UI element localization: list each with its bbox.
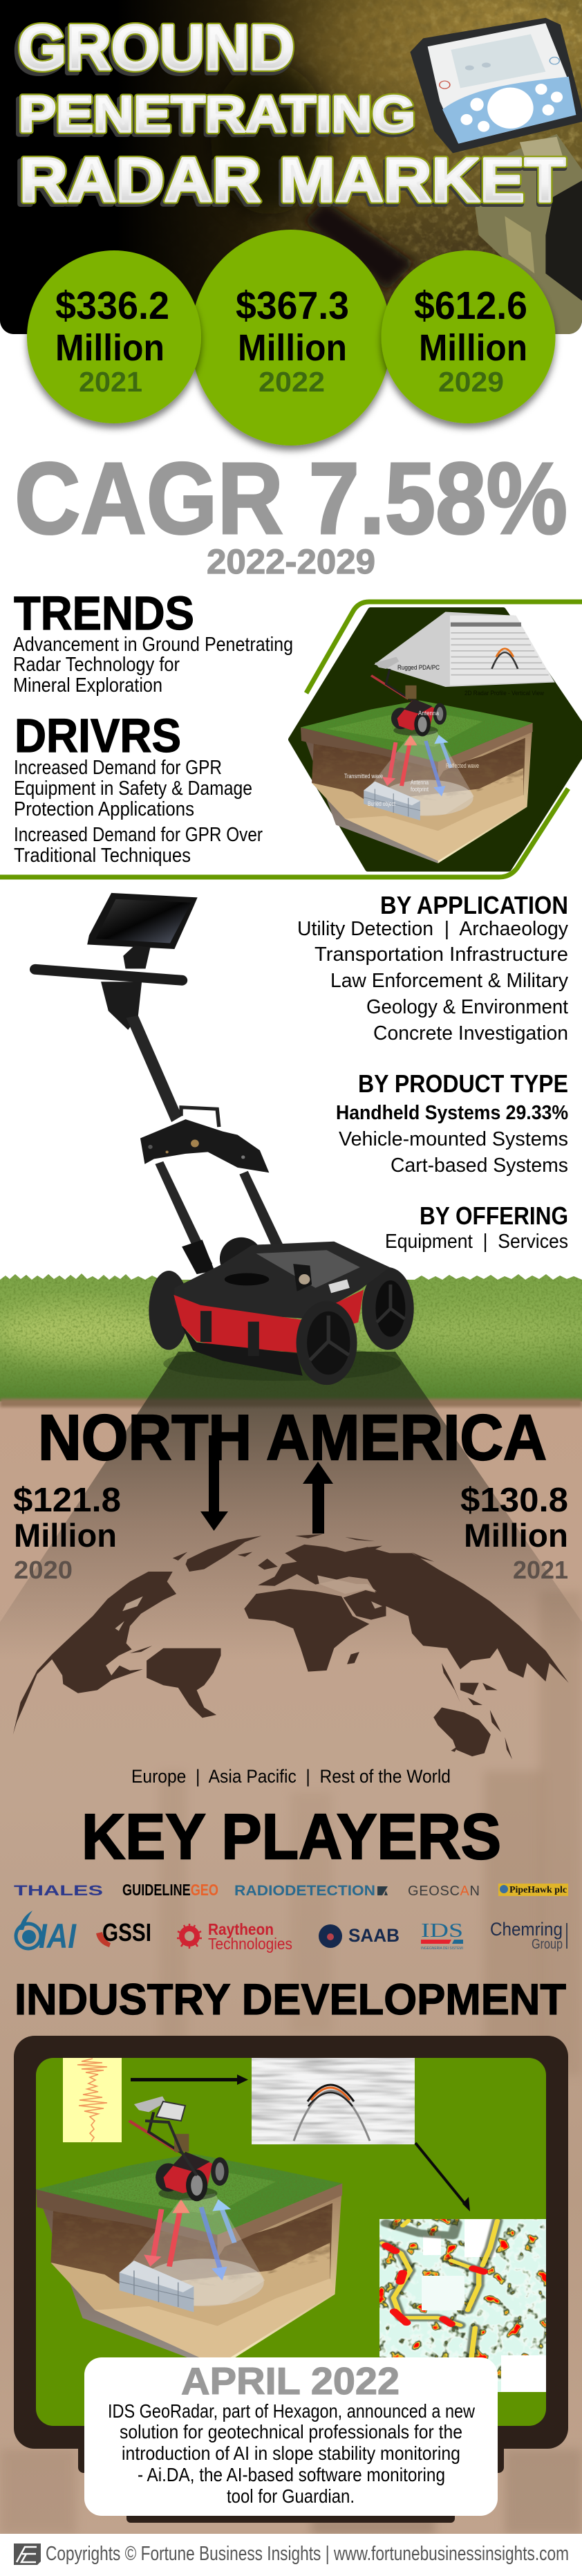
by offering block <box>385 1202 568 1253</box>
footer band <box>0 2534 582 2576</box>
monitor frame <box>14 2036 568 2449</box>
north america 2021 value: 2021 <box>513 1556 568 1584</box>
other regions list: Europe | Asia Pacific | Rest of the World <box>131 1766 451 1787</box>
CAGR period: 2022-2029 <box>207 542 375 581</box>
logo: Thales: THALES <box>14 1883 103 1899</box>
north america 2020 value <box>13 1482 121 1584</box>
title: PENETRATING <box>19 86 415 142</box>
card text: solution for geotechnical professionals for the <box>120 2421 462 2442</box>
logo: Raytheon Technologies: Raytheon <box>208 1920 274 1938</box>
drivers text block <box>14 709 263 867</box>
logo: Chemring Group <box>490 1919 567 1952</box>
logo: Chemring Group: Chemring <box>490 1919 563 1940</box>
cart tablet and handle <box>145 2101 197 2175</box>
title: GROUND <box>18 12 294 83</box>
by application block <box>297 891 568 1045</box>
by application block: Concrete Investigation <box>373 1022 568 1045</box>
by product type block: Vehicle-mounted Systems <box>339 1128 568 1150</box>
diagram labels: Reflected wave <box>446 762 479 770</box>
soil block illustration <box>34 2096 345 2368</box>
card text: IDS GeoRadar, part of Hexagon, announced a new <box>108 2400 476 2422</box>
logo: IDS: IDS <box>421 1920 463 1942</box>
market value circle: 2029 <box>382 250 556 423</box>
key players heading: KEY PLAYERS <box>82 1801 501 1873</box>
icon: detector console <box>410 18 582 153</box>
monitor stand <box>78 2398 504 2523</box>
logo: Geoscan: GEOSCAN <box>408 1884 480 1899</box>
by product type block: Handheld Systems 29.33% <box>336 1102 568 1124</box>
market value circle: 2021: Million <box>55 327 165 369</box>
arrow: up from map <box>303 1462 333 1534</box>
trends text block: Radar Technology for <box>13 654 180 676</box>
north america 2020 value: 2020 <box>14 1556 73 1584</box>
logo: IDS <box>421 1920 463 1951</box>
title: GROUND <box>15 16 294 86</box>
market value circle: 2022: $367.3 <box>236 284 349 328</box>
card text: - Ai.DA, the AI-based software monitoring <box>138 2464 445 2485</box>
diagram labels: Rugged PDA/PC <box>397 664 440 672</box>
drivers text block: Equipment in Safety & Damage <box>14 778 252 800</box>
logo: IAI <box>16 1911 77 1956</box>
drivers text block: Traditional Techniques <box>14 845 191 867</box>
diagram labels: footprint <box>411 786 429 793</box>
market value circle: 2029: 2029 <box>438 366 504 398</box>
market value circle: 2022 <box>191 230 391 445</box>
logo: Saab: SAAB <box>348 1925 400 1946</box>
title: PENETRATING <box>15 89 415 145</box>
trends text block: Advancement in Ground Penetrating <box>13 634 293 656</box>
panel: GPR diagram hexagon <box>291 610 582 869</box>
radargram image <box>252 2058 415 2144</box>
green frame lines <box>0 602 582 877</box>
north america 2021 value: $130.8 <box>460 1482 568 1519</box>
world map <box>13 1534 569 1759</box>
logo: PipeHawk <box>498 1884 568 1896</box>
soldier arm camo <box>475 134 582 334</box>
by application block: BY APPLICATION <box>380 891 568 919</box>
logo: Saab <box>319 1924 400 1948</box>
trends text block <box>13 587 293 697</box>
ground: grass strip <box>0 1273 582 1404</box>
logo: GSSI: GSSI <box>102 1918 151 1947</box>
title <box>15 12 565 218</box>
diagram labels: Antenna <box>418 710 440 717</box>
by offering block: Equipment | Services <box>385 1231 568 1253</box>
diagram labels <box>344 664 544 808</box>
title: RADAR MARKET <box>19 146 565 215</box>
arrow: radargram to heat map <box>415 2143 470 2211</box>
title: RADAR MARKET <box>16 149 565 218</box>
arrow: trace to radargram <box>131 2074 248 2085</box>
radar profile panel <box>374 612 555 687</box>
radar beam cone <box>0 1352 582 1674</box>
trends text block: Mineral Exploration <box>13 674 162 697</box>
white development card <box>84 2357 498 2516</box>
icon: Fortune Business Insights logo <box>14 2543 41 2565</box>
card text <box>108 2400 476 2507</box>
trends text block: TRENDS <box>14 587 194 640</box>
north america 2020 value: Million <box>14 1517 117 1554</box>
by application block: Utility Detection | Archaeology <box>297 918 568 940</box>
by application block: Law Enforcement & Military <box>330 970 568 992</box>
market value circle: 2021: $336.2 <box>55 284 169 328</box>
market value circle: 2029: Million <box>419 327 527 369</box>
diagram labels: 2D Radar Profile - Vertical View <box>464 690 544 697</box>
monitor screen <box>36 2058 546 2426</box>
card text: introduction of AI in slope stability monitoring <box>122 2442 460 2464</box>
drivers text block: Increased Demand for GPR <box>14 757 222 779</box>
logo: Raytheon Technologies: Technologies <box>208 1935 292 1953</box>
north america 2020 value: $121.8 <box>13 1482 121 1519</box>
logo: PipeHawk: PipeHawk plc <box>509 1885 567 1895</box>
market value circle: 2022: Million <box>238 327 347 369</box>
title: PENETRATING <box>19 86 415 142</box>
drivers text block: DRIVRS <box>15 709 181 762</box>
by product type block: Cart-based Systems <box>391 1154 568 1177</box>
soil block with radar cart <box>299 657 534 863</box>
logo: IDS: INGEGNERIA DEI SISTEMI <box>421 1947 463 1951</box>
market value circle: 2029: $612.6 <box>414 284 527 328</box>
seismic trace panel <box>63 2058 122 2142</box>
by application block: Transportation Infrastructure <box>315 944 568 966</box>
arrow: down to map <box>200 1435 228 1531</box>
industry development heading: INDUSTRY DEVELOPMENT <box>15 1976 566 2024</box>
logo: Guideline Geo: GUIDELINEGEO <box>122 1881 218 1899</box>
logo: Radiodetection: RADIODETECTION <box>234 1883 375 1899</box>
north america 2021 value: Million <box>464 1517 568 1554</box>
region heading: NORTH AMERICA <box>38 1401 547 1473</box>
by product type block <box>336 1069 568 1177</box>
logo: Chemring Group: Group <box>532 1937 563 1952</box>
card text: tool for Guardian. <box>227 2485 355 2507</box>
ground: soil background <box>0 1399 582 2534</box>
market value circle: 2021 <box>27 250 201 423</box>
diagram labels: Buried object <box>368 800 395 808</box>
card date: APRIL 2022 <box>181 2359 400 2402</box>
cart image: GPR radar cart <box>35 893 414 1385</box>
logo: Raytheon Technologies <box>177 1920 292 1953</box>
title: RADAR MARKET <box>19 146 565 215</box>
north america 2021 value <box>460 1482 568 1584</box>
drivers text block: Increased Demand for GPR Over <box>14 824 263 846</box>
by application block: Geology & Environment <box>366 996 568 1018</box>
diagram labels: Antenna <box>411 779 429 786</box>
heat map <box>379 2219 546 2392</box>
logo: IAI: IAI <box>39 1917 77 1956</box>
market value circle: 2022: 2022 <box>259 366 325 398</box>
header photo panel <box>0 0 582 334</box>
drivers text block: Protection Applications <box>14 798 194 820</box>
market value circle: 2021: 2021 <box>79 366 142 398</box>
title: GROUND <box>18 12 294 83</box>
diagram labels: Transmitted wave <box>344 773 383 780</box>
